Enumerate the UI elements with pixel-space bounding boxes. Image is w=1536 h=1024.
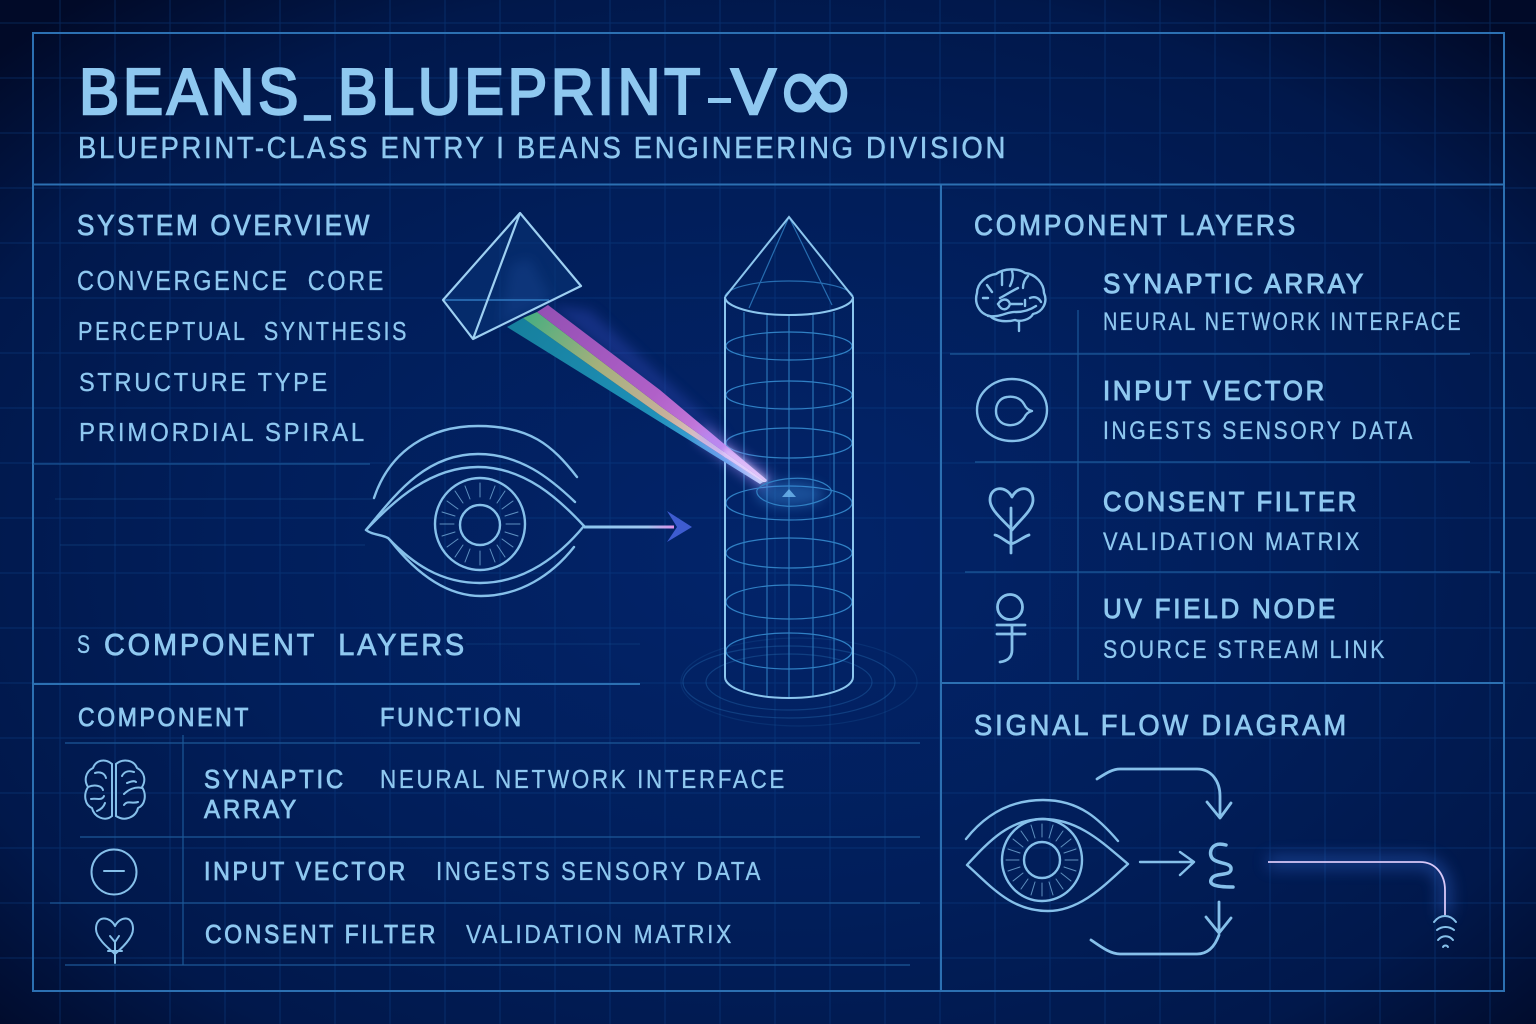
row: consent filter: CONSENT FILTER [205,919,438,949]
icon: signal emitter [1434,916,1456,947]
title [79,30,857,147]
row: validation matrix: VALIDATION MATRIX [466,919,734,949]
spectrum beam [507,305,768,484]
icon: consent heart [96,918,133,963]
title: V [731,55,777,128]
ground ripples [681,638,917,726]
cylinder convergence core [681,217,917,726]
label: consent filter: CONSENT FILTER [1103,486,1359,517]
icon: brain top view [85,761,145,819]
cylinder rings [726,332,852,669]
label: synaptic array: SYNAPTIC ARRAY [1103,268,1366,299]
overview line 2: PERCEPTUAL SYNTHESIS [78,316,409,346]
icon: uv field node [997,594,1025,662]
section heading: component layers (left): S [77,631,90,659]
heading: component layers: COMPONENT LAYERS [974,210,1298,242]
label: uv field node: UV FIELD NODE [1103,593,1338,624]
squiggle node [1211,844,1233,887]
glow trace [1268,862,1445,915]
title: BLUEPRINT [338,55,704,128]
title: ∞ [774,30,857,147]
label: ingests sensory data: INGESTS SENSORY DATA [1103,417,1415,445]
overview line 3: STRUCTURE TYPE [79,367,330,397]
table header: component: COMPONENT [78,702,251,732]
pupil [460,505,500,545]
icon: brain side view [976,269,1045,331]
table header: function: FUNCTION [380,702,524,732]
arrow: feedback bottom [1091,902,1231,954]
main eye [366,426,584,596]
row: input vector: INPUT VECTOR [204,856,408,886]
panel: component layers (right) [950,210,1500,680]
section heading: component layers (left): COMPONENT LAYERS [104,627,467,662]
panel: system overview [77,210,409,447]
overview line 1: CONVERGENCE CORE [77,265,386,296]
label: validation matrix: VALIDATION MATRIX [1103,528,1362,556]
icon: input vector [92,850,136,894]
row: neural network interface: NEURAL NETWORK INTERFACE [380,764,787,794]
cylinder outline [725,217,853,698]
eyelids and brow [366,467,584,583]
icon: consent filter heart [990,489,1033,553]
row: synaptic array: SYNAPTIC [204,764,346,794]
row: ingests sensory data: INGESTS SENSORY DATA [436,856,763,886]
arrow: eye to core [584,511,692,542]
iris ticks [440,483,520,565]
prism [443,213,581,339]
cone inner lines [725,217,853,308]
row: array word: ARRAY [204,794,299,824]
icon: input vector eye [977,379,1047,441]
title: _ [304,48,331,121]
label: input vector: INPUT VECTOR [1103,375,1327,406]
heading: system overview: SYSTEM OVERVIEW [77,210,372,242]
panel: signal flow diagram [966,710,1456,954]
subtitle: BLUEPRINT-CLASS ENTRY I BEANS ENGINEERING DIVISION [78,130,1008,165]
focal point [756,478,831,507]
table rules [50,735,920,965]
overview line 4: PRIMORDIAL SPIRAL [79,417,367,447]
arrow: feedback top [1097,769,1231,818]
flow eye [966,800,1128,911]
iris [435,478,525,570]
right table rules [950,310,1500,680]
arrow: eye to core [1140,852,1194,875]
cylinder vertical lines [744,312,834,698]
title: BEANS [79,55,302,128]
label: source stream link: SOURCE STREAM LINK [1103,636,1387,664]
heading: signal flow diagram: SIGNAL FLOW DIAGRAM [974,710,1349,742]
panel: component table [50,702,920,965]
